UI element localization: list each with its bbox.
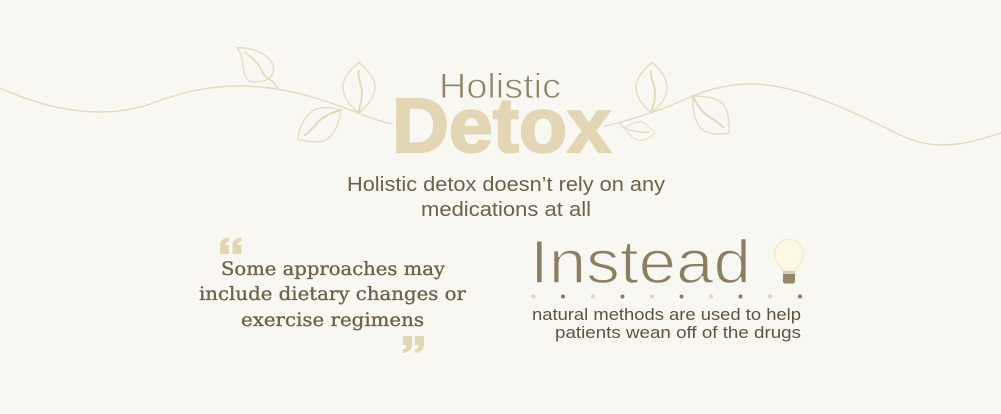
leaf: large right bbox=[693, 96, 729, 134]
subtitle bbox=[347, 174, 665, 221]
title line: Holistic: Holistic bbox=[439, 67, 561, 106]
left vine with leaves bbox=[0, 48, 392, 142]
heading: Instead: Instead bbox=[530, 228, 751, 296]
title line: Detox: Detox bbox=[392, 83, 611, 169]
right vine with leaves bbox=[604, 62, 1001, 145]
subtitle: Holistic detox doesn’t rely on any bbox=[347, 174, 665, 196]
body text: natural methods bbox=[532, 305, 801, 342]
body text: natural methods: natural methods are used to help bbox=[532, 305, 801, 324]
leaf: upper left bbox=[237, 48, 278, 88]
body text: natural methods: patients wean off of the drugs bbox=[555, 323, 801, 342]
leaf: upper bbox=[636, 62, 667, 113]
icon: opening quote mark bbox=[220, 238, 242, 254]
subtitle: medications at all bbox=[421, 199, 591, 221]
quote text: include dietary changes or bbox=[199, 283, 467, 305]
quote text: Some approaches may bbox=[221, 258, 445, 280]
leaf: upper middle bbox=[343, 62, 375, 113]
dotted divider bbox=[532, 294, 802, 298]
title bbox=[392, 67, 611, 169]
quote text: exercise regimens bbox=[241, 309, 424, 331]
leaf: lower bbox=[298, 108, 341, 142]
leaf: small lower bbox=[620, 122, 655, 141]
icon: closing quote mark bbox=[403, 336, 424, 353]
quote text bbox=[199, 258, 467, 331]
icon: light bulb bbox=[774, 240, 804, 284]
